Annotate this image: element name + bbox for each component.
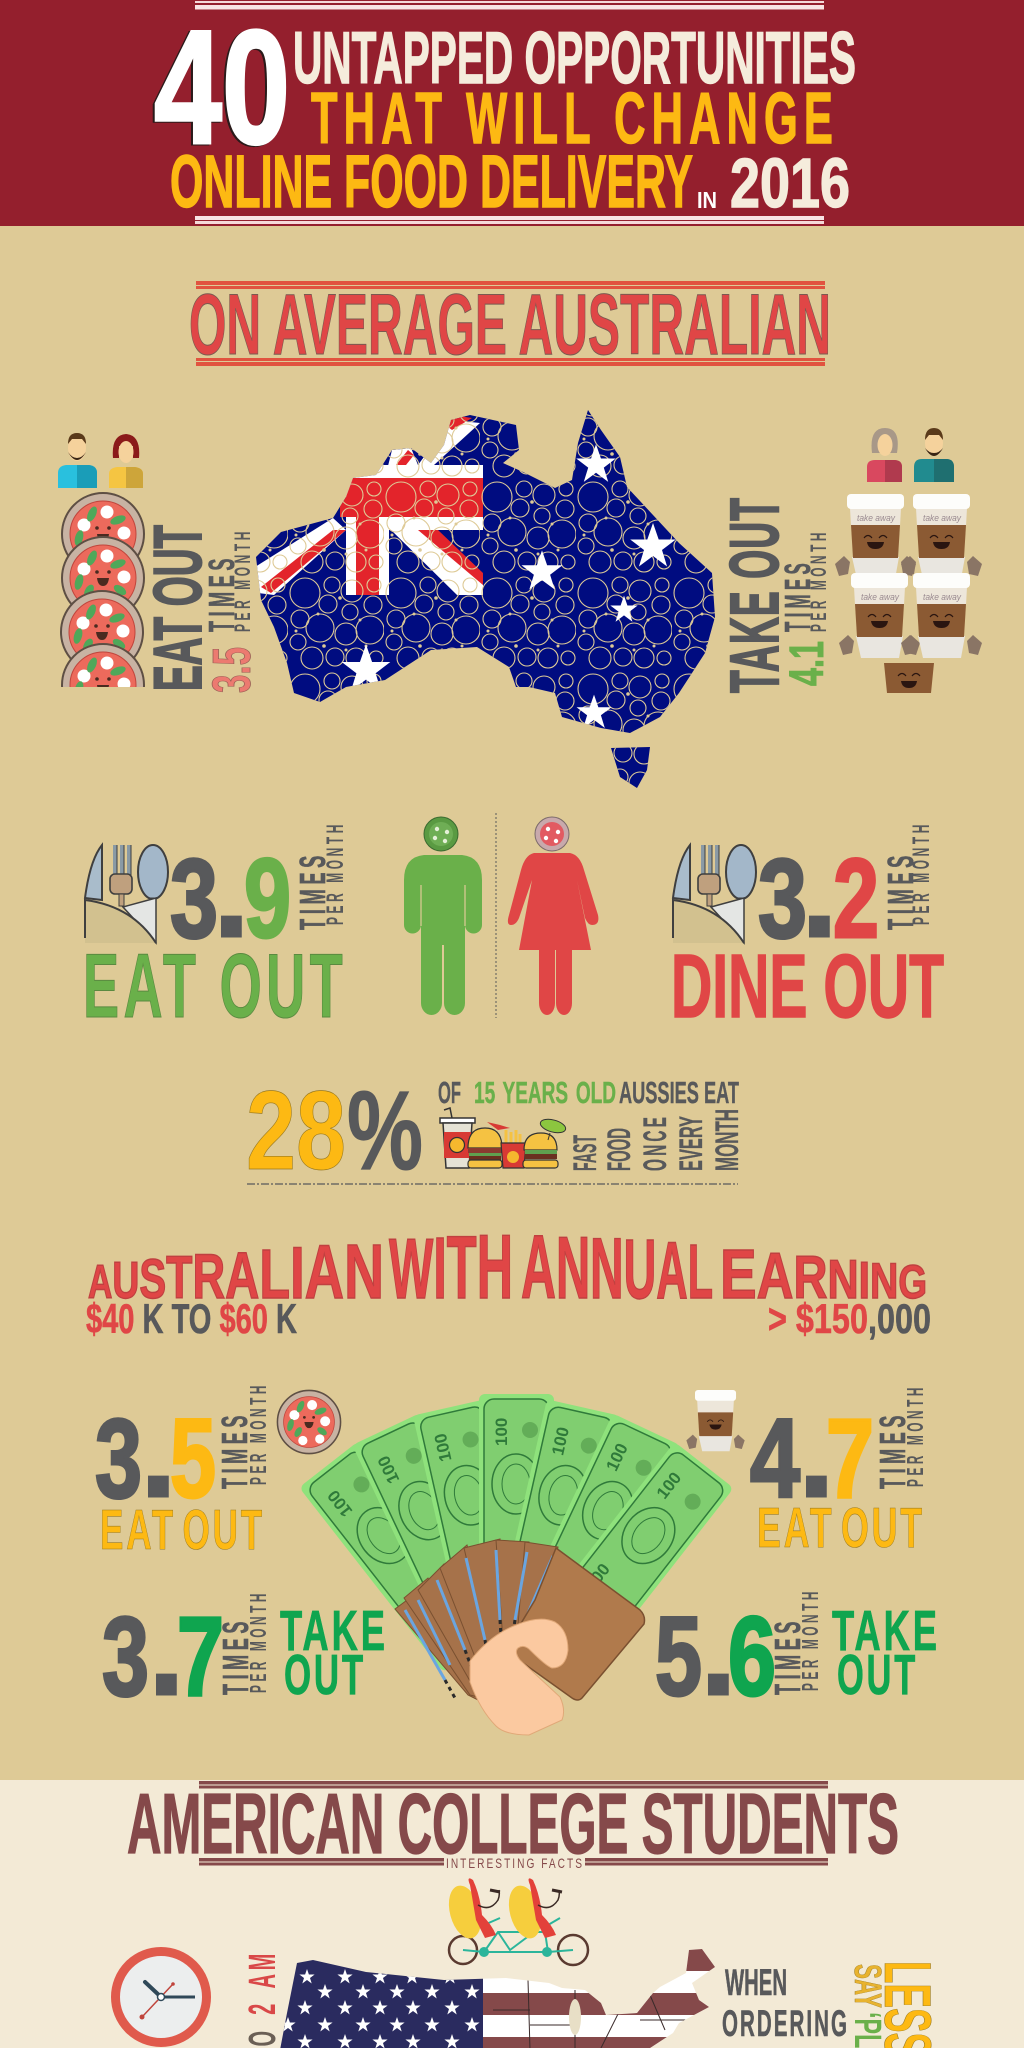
sentence: AUSSIES EAT xyxy=(619,1075,739,1110)
number 4.7: 4 xyxy=(750,1396,800,1521)
heading rules bottom xyxy=(199,1858,828,1866)
stat: eat out rotated labels: 3.5 xyxy=(202,647,262,693)
icon: stacked pizzas xyxy=(60,492,145,687)
stat: eat out rotated labels: EAT OUT xyxy=(140,525,216,691)
number 5.6: 5 xyxy=(655,1594,702,1719)
icon: male figure xyxy=(404,817,482,1015)
icon: cutlery right xyxy=(673,845,756,943)
note 5: 100 xyxy=(548,1425,573,1457)
icon: couple left xyxy=(58,433,143,488)
rotated words xyxy=(567,1109,745,1171)
icon: smiling takeaway cups: take away xyxy=(923,592,961,602)
note 5 xyxy=(495,1399,620,1645)
label take out: TAKE xyxy=(832,1599,940,1663)
icon: couple right xyxy=(867,428,954,482)
label take out xyxy=(280,1599,388,1707)
note 4 xyxy=(479,1394,554,1634)
stat: take out rotated labels: TIMES xyxy=(777,559,818,632)
number 3.7: 3 xyxy=(102,1594,149,1719)
title word in: IN xyxy=(697,187,717,213)
stat: take out rotated labels: TAKE OUT xyxy=(716,497,793,693)
heading: australian with annual earning: EARNING xyxy=(720,1235,927,1313)
label take out: OUT xyxy=(284,1643,366,1707)
number 3.5 xyxy=(95,1370,216,1527)
number 3.9 xyxy=(170,810,291,967)
number 3.2: . xyxy=(800,810,839,967)
icon: fast food xyxy=(440,1108,567,1168)
number 3.5: 3 xyxy=(95,1396,142,1521)
sentence: 15 YEARS OLD xyxy=(474,1075,616,1110)
number 28%: 28 xyxy=(246,1068,346,1193)
stat: take out rotated labels: 4.1 xyxy=(781,641,834,686)
icon: pizza xyxy=(277,1390,341,1454)
label eat out: EAT OUT xyxy=(100,1498,265,1562)
icon: cutlery left xyxy=(85,845,168,943)
label eat out: EAT OUT xyxy=(83,936,347,1037)
icon: smiling takeaway cups xyxy=(835,494,982,693)
times per month: TIMES xyxy=(880,851,921,930)
panel: american college students xyxy=(0,1777,1024,2048)
rotated words: FAST xyxy=(567,1135,603,1171)
note 7: 100 xyxy=(581,1560,614,1594)
note 2 xyxy=(352,1413,520,1658)
icon: smiling takeaway cups: take away xyxy=(861,592,899,602)
text: when ordering: WHEN xyxy=(725,1962,787,2003)
stat: 3.5 eat out lower income xyxy=(95,1370,341,1562)
number 4.7: 7 xyxy=(826,1396,874,1521)
note 3: 100 xyxy=(431,1432,456,1463)
rotated words: MONTH xyxy=(709,1109,745,1171)
number 3.5: 5 xyxy=(170,1396,216,1521)
times per month: PER MONTH xyxy=(902,1384,928,1487)
stat: men eat out: PER MONTH xyxy=(322,821,349,925)
number 3.2: 2 xyxy=(833,836,879,961)
number 5.6 xyxy=(655,1568,776,1725)
map: australia flag bubbles xyxy=(250,405,720,795)
icon: clock xyxy=(116,1952,206,2042)
label take out xyxy=(832,1599,940,1707)
panel: header banner xyxy=(0,0,1024,226)
text: when ordering xyxy=(722,1962,849,2044)
stat: men eat out xyxy=(83,810,349,1037)
times per month: TIMES xyxy=(292,851,333,930)
heading: australian with annual earning: ANNUAL xyxy=(521,1218,713,1318)
times per month: PER MONTH xyxy=(245,1382,271,1485)
heading: australian with annual earning: AUSTRALIAN xyxy=(88,1229,384,1315)
illustration: wallet with cards and hand xyxy=(395,1539,644,1735)
stat: 5.6 take out higher income xyxy=(655,1568,940,1725)
number 5.6: . xyxy=(699,1568,738,1725)
number 28%: % xyxy=(347,1068,423,1193)
number 3.9: . xyxy=(212,810,251,967)
stat: take out rotated labels xyxy=(716,497,834,693)
icon: coffee cup xyxy=(686,1390,745,1451)
times per month: TIMES xyxy=(214,1411,255,1489)
text: when ordering: ORDERING xyxy=(722,2003,849,2044)
subheading: income range left: $40 K TO $60 K xyxy=(86,1295,297,1342)
note 1 xyxy=(299,1441,503,1673)
heading: australian with annual earning: WITH xyxy=(389,1217,513,1318)
rotated words: ONCE xyxy=(637,1114,673,1171)
stat: women dine out xyxy=(671,810,944,1037)
number 3.9: 3 xyxy=(170,836,218,961)
number 4.7: . xyxy=(797,1370,836,1527)
stat: take out rotated labels: PER MONTH xyxy=(806,529,831,632)
stat: women dine out: PER MONTH xyxy=(908,821,935,925)
title number 40: 40 xyxy=(154,0,290,178)
icon: smiling takeaway cups: take away xyxy=(857,513,895,523)
stat: eat out rotated labels: TIMES xyxy=(201,554,242,632)
number 3.2: 3 xyxy=(758,836,807,961)
illustration: banknote fan xyxy=(299,1394,734,1673)
icon: female figure xyxy=(508,817,598,1015)
note 1: 100 xyxy=(324,1486,356,1520)
stat: eat out rotated labels xyxy=(140,525,262,693)
heading rules top xyxy=(199,1781,828,1788)
label eat out: EAT OUT xyxy=(757,1496,925,1560)
times per month: TIMES xyxy=(872,1411,913,1489)
map: usa flag xyxy=(280,1949,715,2048)
number 4.7 xyxy=(750,1370,874,1527)
divider xyxy=(495,813,497,1018)
rotated words: EVERY xyxy=(673,1116,709,1171)
times per month xyxy=(880,821,935,930)
number 5.6: 6 xyxy=(728,1594,776,1719)
number 3.5: . xyxy=(139,1370,178,1527)
stat: 28 percent fast food xyxy=(246,1068,745,1193)
sentence: OF xyxy=(438,1075,461,1110)
label take out: OUT xyxy=(837,1643,918,1707)
note 6: 100 xyxy=(602,1440,632,1474)
rotated text: say please: SAY xyxy=(846,1964,888,2008)
times per month xyxy=(215,1590,271,1695)
times per month xyxy=(214,1382,271,1489)
times per month xyxy=(292,821,349,930)
number 3.7: 7 xyxy=(177,1594,224,1719)
number 3.7 xyxy=(102,1568,224,1725)
times per month: TIMES xyxy=(767,1617,808,1695)
title year 2016: 2016 xyxy=(730,144,850,222)
note 7: 100 xyxy=(653,1468,685,1503)
subtitle interesting facts: INTERESTING FACTS xyxy=(446,1855,584,1871)
times per month: PER MONTH xyxy=(797,1588,823,1691)
icon: smiling takeaway cups: take away xyxy=(923,513,961,523)
subheading: income range right: > $150,000 xyxy=(768,1295,931,1342)
times per month xyxy=(872,1384,928,1489)
stat: 4.7 eat out higher income xyxy=(686,1370,928,1560)
icon: hotdogs on tandem bike xyxy=(444,1878,588,1965)
note 3 xyxy=(413,1399,538,1645)
stat: eat out rotated labels: PER MONTH xyxy=(230,528,255,632)
note 4: 100 xyxy=(492,1418,511,1446)
label take out: TAKE xyxy=(280,1599,388,1663)
times per month: TIMES xyxy=(215,1617,256,1695)
note 2: 100 xyxy=(374,1453,403,1487)
heading: australian with annual earning xyxy=(88,1217,927,1318)
note 7 xyxy=(530,1442,734,1673)
number 3.7: . xyxy=(147,1568,186,1725)
number 3.9: 9 xyxy=(244,836,291,961)
number 3.2 xyxy=(758,810,879,967)
rotated words: FOOD xyxy=(601,1128,637,1171)
times per month: PER MONTH xyxy=(245,1590,271,1693)
times per month xyxy=(767,1588,823,1695)
note 6 xyxy=(512,1413,681,1658)
stat: 3.7 take out lower income xyxy=(102,1568,388,1725)
